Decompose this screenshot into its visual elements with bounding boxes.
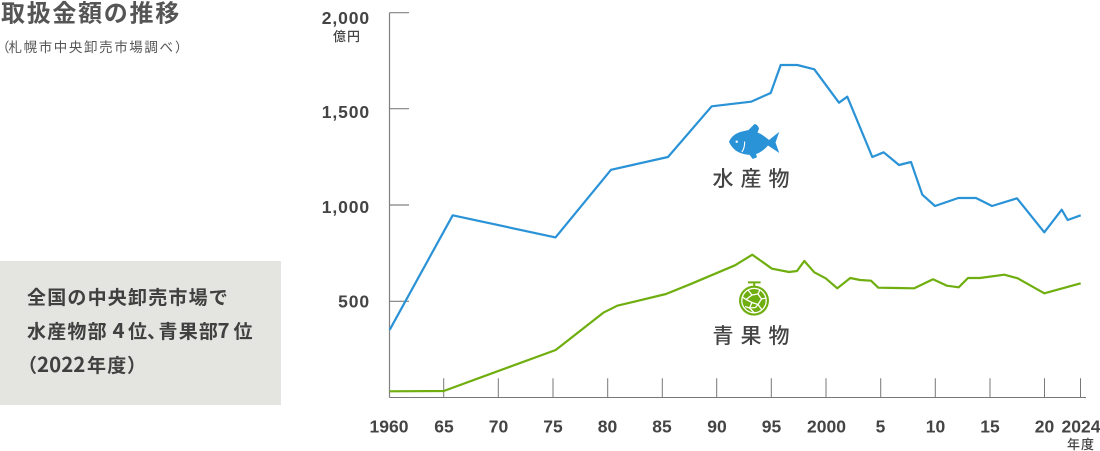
subtitle: source note: 札幌市中央卸売市場調べ bbox=[8, 36, 175, 56]
x axis labels: 10 bbox=[926, 416, 945, 436]
line: marine products bbox=[390, 65, 1081, 330]
y axis labels: 1,500 bbox=[322, 102, 370, 122]
panel: national ranking callout: 2022 bbox=[37, 348, 85, 378]
panel: national ranking callout: 位 bbox=[234, 317, 253, 344]
x axis labels: 2000 bbox=[807, 416, 846, 436]
x axis labels: 20 bbox=[1035, 416, 1054, 436]
x axis labels: 5 bbox=[876, 416, 886, 436]
line: fruits and vegetables bbox=[390, 255, 1081, 391]
y axis labels: 2,000 bbox=[322, 8, 370, 28]
x axis labels bbox=[370, 416, 1100, 436]
y axis labels: 1,000 bbox=[322, 197, 370, 217]
icon: melon bbox=[739, 282, 769, 316]
x axis labels: 90 bbox=[707, 416, 727, 436]
panel: national ranking callout: 年度 bbox=[87, 351, 127, 378]
x axis labels: 65 bbox=[434, 416, 454, 436]
panel: national ranking callout: 7 bbox=[218, 314, 230, 344]
x axis labels: 85 bbox=[652, 416, 672, 436]
x axis labels: 75 bbox=[543, 416, 563, 436]
x axis labels: 2024 bbox=[1062, 416, 1100, 436]
panel: national ranking callout: 青果部 bbox=[158, 317, 219, 344]
x axis labels: 80 bbox=[598, 416, 617, 436]
icon: fish bbox=[729, 124, 779, 159]
panel: national ranking callout: 水産物部 bbox=[27, 317, 108, 344]
panel: national ranking callout: ） bbox=[127, 351, 146, 378]
y axis unit: 億円 bbox=[333, 26, 361, 45]
x axis labels: 1960 bbox=[370, 416, 409, 436]
panel: national ranking callout bbox=[0, 261, 281, 405]
panel: national ranking callout: 全国の中央卸売市場で bbox=[27, 283, 229, 310]
panel: national ranking callout: 4 bbox=[112, 314, 125, 344]
subtitle: source note: ） bbox=[175, 36, 188, 56]
panel: national ranking callout: （ bbox=[18, 351, 37, 378]
y axis labels bbox=[322, 8, 370, 312]
chart: x axis with ticks bbox=[390, 378, 1086, 398]
label: fruits and vegetables: 青果物 bbox=[712, 320, 796, 350]
label: marine products: 水産物 bbox=[712, 163, 796, 193]
x axis labels: 15 bbox=[980, 416, 1000, 436]
chart: y axis with ticks bbox=[390, 13, 409, 397]
x axis labels: 95 bbox=[762, 416, 781, 436]
panel: national ranking callout: 位、 bbox=[128, 317, 166, 344]
x axis labels: 70 bbox=[489, 416, 508, 436]
y axis labels: 500 bbox=[338, 292, 370, 312]
